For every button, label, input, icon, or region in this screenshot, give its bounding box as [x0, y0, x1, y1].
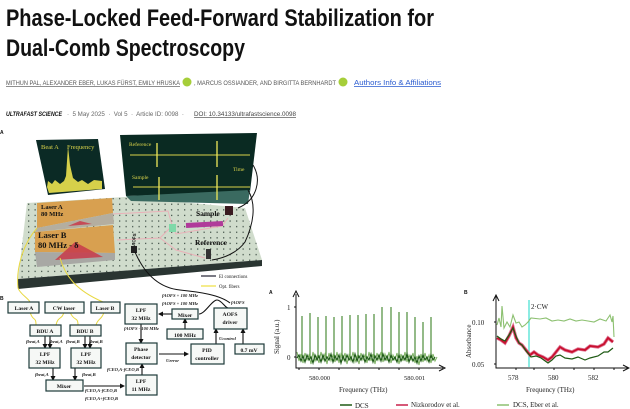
AOFS driver: AOFS	[223, 312, 237, 318]
BDU A	[30, 325, 61, 336]
LPF 32 top: LPF	[136, 308, 147, 314]
CW laser block: CW laser	[53, 306, 76, 312]
signal labels: fAOFS + 100 MHz	[162, 293, 198, 298]
signal labels: fbeat,B	[89, 339, 103, 344]
chart B: 578	[508, 374, 519, 382]
LPF 2: 32 MHz	[76, 360, 96, 366]
chart A: A	[269, 290, 273, 296]
chart A	[269, 290, 445, 394]
chart A series	[302, 307, 431, 358]
LPF 11	[126, 375, 157, 395]
LPF 2: LPF	[81, 352, 92, 358]
signal labels: fCEO,A+fCEO,B	[85, 396, 118, 401]
signal labels: fCEO,A-fCEO,B	[85, 388, 117, 393]
authors	[6, 78, 348, 87]
chart B: B	[464, 290, 468, 296]
beam paths	[113, 211, 228, 258]
signal labels: fbeat,A	[49, 339, 63, 344]
block diagram	[8, 293, 264, 401]
dark green series	[497, 328, 613, 363]
PID	[191, 344, 224, 364]
laser A box: Laser A	[41, 204, 63, 211]
chart B: 0.05	[472, 361, 485, 369]
chart B: 2·CW	[531, 303, 548, 311]
time-domain screen	[120, 133, 257, 204]
0.7 mV	[235, 344, 264, 354]
signal labels: fCEO,A-fCEO,B	[107, 367, 139, 372]
spectrum screen: Frequency	[67, 144, 95, 151]
PID: controller	[195, 356, 219, 362]
chart A: Signal (a.u.)	[273, 319, 281, 354]
panel label A: A	[0, 130, 4, 136]
phase detector: Phase	[134, 347, 149, 353]
chart A: 580.001	[404, 375, 425, 382]
laser A block	[8, 302, 39, 313]
phase detector: detector	[131, 355, 151, 361]
red series	[497, 327, 613, 360]
journal meta: DOI: 10.34133/ultrafastscience.0098	[194, 111, 296, 118]
title: Phase-Locked Feed-Forward Stabilization for	[6, 5, 434, 32]
laser A box	[35, 198, 114, 232]
signal labels: fbeat,B	[66, 339, 80, 344]
LPF 2	[71, 348, 101, 368]
panel label B: B	[0, 296, 4, 302]
PID: PID	[202, 348, 212, 354]
chart legend: Nizkorodov et al.	[411, 401, 460, 409]
chart legend	[340, 401, 559, 409]
CW laser block	[45, 302, 84, 313]
journal meta: · 5 May 2025 · Vol 5 · Article ID: 0098 ·	[67, 111, 184, 118]
laser A block: Laser A	[15, 306, 33, 312]
signal labels: Ucontrol	[219, 336, 237, 341]
sample and reference labels: Reference	[195, 238, 228, 247]
signal labels: fbeat,B	[82, 372, 96, 377]
chart B: Frequency (THz)	[526, 386, 575, 394]
signal labels: fbeat,A	[26, 339, 40, 344]
sample and reference labels	[131, 206, 233, 259]
LPF 32 top	[125, 304, 157, 324]
BDU B	[70, 325, 101, 336]
phase detector	[126, 343, 157, 364]
optical table	[18, 197, 262, 289]
chart B: Absorbance	[465, 325, 473, 358]
AOFS driver: driver	[223, 320, 238, 326]
chart legend: DCS, Eber et al.	[513, 401, 559, 409]
chart A: 580.000	[309, 375, 330, 382]
chart A: Frequency (THz)	[339, 386, 388, 394]
time-domain screen: Time	[233, 167, 245, 173]
authors: , MARCUS OSSIANDER, AND BIRGITTA BERNHARDT	[194, 80, 336, 87]
spectrum screen: Beat A	[41, 144, 59, 151]
LPF 1: LPF	[40, 352, 51, 358]
BDU A: BDU A	[37, 329, 53, 335]
100 MHz: 100 MHz	[174, 333, 196, 339]
LPF 32 top: 32 MHz	[131, 316, 151, 322]
authors link: Authors Info & Affiliations	[354, 78, 441, 87]
0.7 mV: 0.7 mV	[240, 348, 258, 354]
chart B: 580	[548, 374, 559, 382]
chart A: 0	[287, 354, 291, 362]
LPF 1: 32 MHz	[35, 360, 55, 366]
AOFS driver	[214, 308, 247, 329]
journal meta	[6, 111, 296, 118]
time-domain screen: Reference	[129, 141, 152, 148]
BDU B: BDU B	[77, 329, 94, 335]
signal labels	[26, 293, 245, 401]
mixer left: Mixer	[57, 384, 72, 390]
table legend	[201, 275, 248, 290]
title line 2: Dual-Comb Spectroscopy	[6, 35, 246, 62]
signal labels: fAOFS + 100 MHz	[162, 301, 198, 306]
chart B: 0.10	[472, 319, 485, 327]
laser B block: Laser B	[96, 306, 115, 312]
signal labels: fAOFS - 100 MHz	[124, 326, 159, 331]
laser B box	[35, 225, 115, 267]
mixer top	[172, 309, 198, 319]
authors: MITHUN PAL, ALEXANDER EBER, LUKAS FÜRST, EMILY HRUSKA	[6, 79, 181, 87]
time-domain screen: Sample	[132, 175, 149, 181]
table legend: El connections	[219, 275, 248, 280]
chart B: 582	[588, 374, 599, 382]
signal labels: Uerror	[166, 358, 179, 363]
2-CW marker	[528, 300, 530, 367]
LPF 1	[29, 348, 60, 368]
signal labels: fAOFS	[231, 300, 245, 305]
chart B axes	[493, 295, 629, 371]
sample and reference labels: AOFS	[131, 233, 137, 246]
mixer left	[46, 380, 83, 391]
chart A axes	[293, 291, 445, 371]
journal meta: ULTRAFAST SCIENCE	[6, 111, 63, 118]
mixer top: Mixer	[178, 313, 193, 319]
table legend: Opt. fibers	[219, 285, 240, 290]
chart B	[464, 290, 629, 394]
spectrum screen	[36, 139, 105, 195]
green reference series	[497, 306, 614, 337]
sample and reference labels: Sample	[196, 209, 220, 218]
laser B box: 80 MHz - δ	[38, 240, 79, 250]
100 MHz	[167, 329, 203, 339]
laser B box: Laser B	[38, 230, 67, 240]
laser B block	[91, 302, 120, 313]
signal labels: fbeat,A	[35, 372, 49, 377]
LPF 11: 11 MHz	[132, 387, 151, 393]
LPF 11: LPF	[136, 379, 147, 385]
laser A box: 80 MHz	[41, 211, 63, 218]
chart A: 1	[287, 304, 291, 312]
cables	[18, 165, 257, 303]
